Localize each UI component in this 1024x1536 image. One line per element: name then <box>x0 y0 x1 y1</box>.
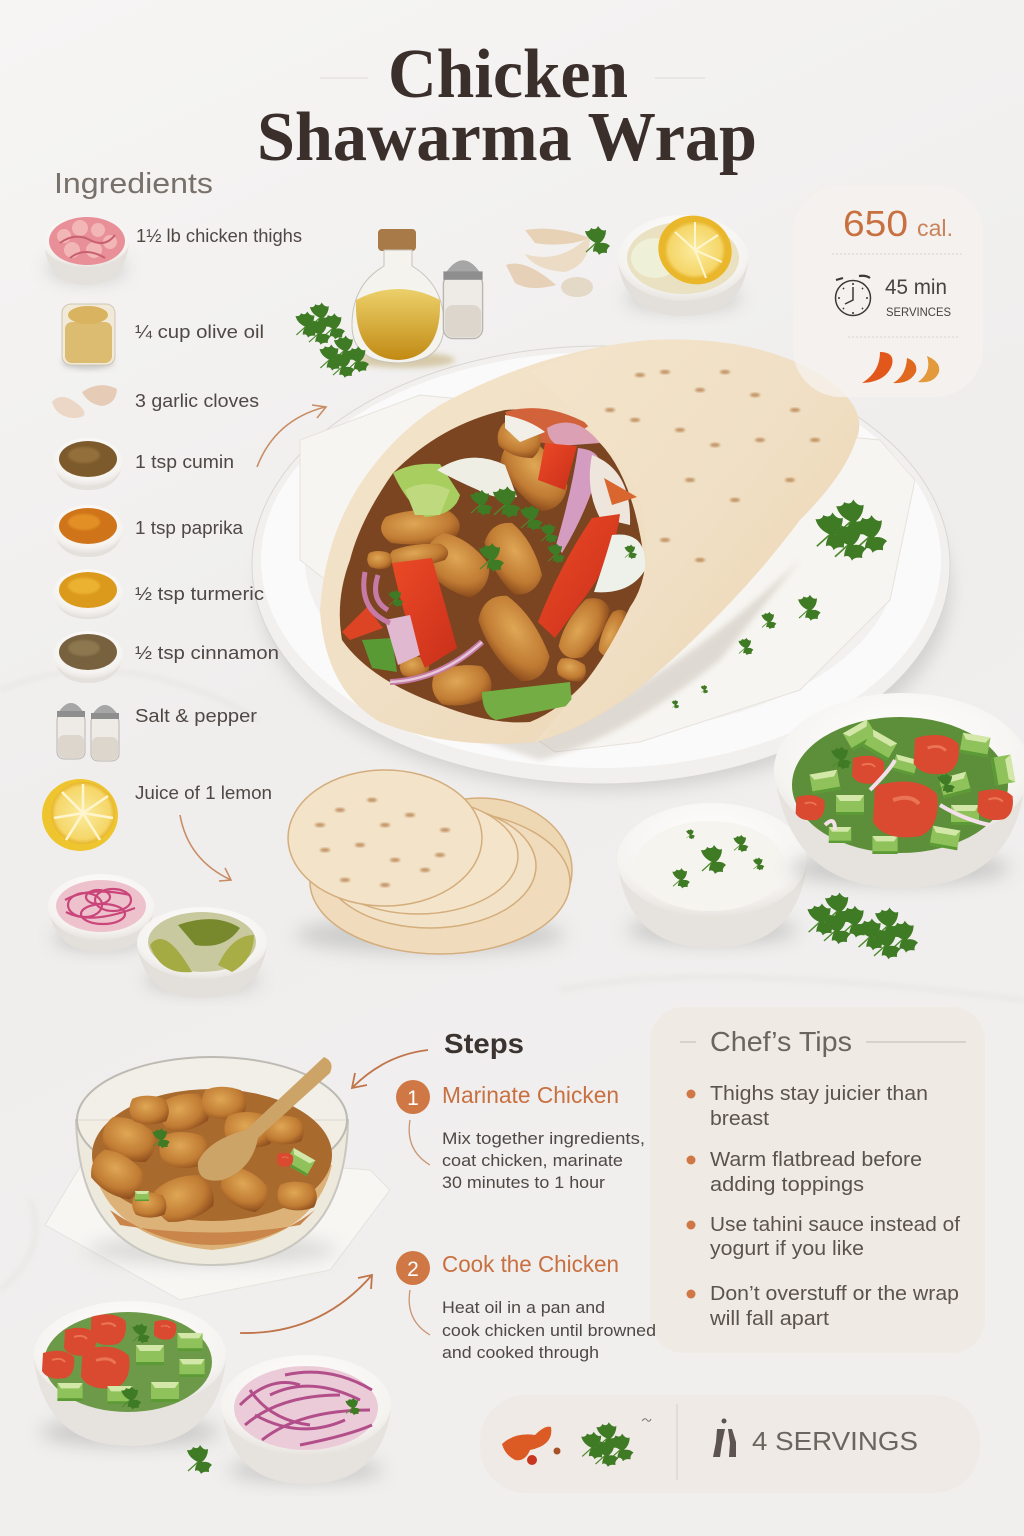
title: Shawarma Wrap <box>257 99 757 176</box>
parsley sprig near bottle <box>296 302 369 378</box>
tip 4: will fall apart <box>709 1308 829 1330</box>
ingredient: cumin: 1 tsp cumin <box>135 452 234 472</box>
tip 3: Use tahini sauce instead of <box>710 1214 960 1236</box>
tip 2 <box>686 1149 922 1196</box>
bowl: red onions <box>221 1355 391 1484</box>
tip 4: Don’t overstuff or the wrap <box>710 1283 959 1305</box>
panel: servings pill <box>480 1395 980 1493</box>
oil bottle <box>352 229 455 368</box>
garlic group <box>506 226 610 297</box>
tip 4 <box>686 1283 959 1330</box>
calories: cal. <box>917 215 953 241</box>
ingredient: salt and pepper: Salt & pepper <box>135 706 257 726</box>
ingredient: salt and pepper <box>57 703 257 761</box>
ingredient: cumin <box>53 438 234 490</box>
tip 1 <box>686 1083 928 1130</box>
step 1 <box>396 1080 645 1192</box>
glass bowl: marinating chicken <box>45 1057 390 1300</box>
panel: ingredients list <box>42 217 302 851</box>
ingredient: chicken thighs <box>43 217 302 285</box>
tip 2: Warm flatbread before <box>710 1149 922 1171</box>
arrow: steps to bowl <box>352 1050 428 1088</box>
tip 1: Thighs stay juicier than <box>710 1083 928 1105</box>
wooden spoon <box>198 1057 332 1181</box>
bowl: lemon <box>618 205 748 316</box>
bowl: pickled onion <box>48 874 154 952</box>
heading: ingredients: Ingredients <box>54 168 213 200</box>
step 2 <box>396 1251 656 1362</box>
flatbread outer fold <box>530 340 859 742</box>
salt shaker <box>443 260 483 339</box>
ingredient: paprika: 1 tsp paprika <box>135 518 244 538</box>
icon: stopwatch <box>836 276 870 316</box>
filling <box>340 409 645 722</box>
time <box>885 276 951 319</box>
wrap <box>320 340 887 760</box>
ingredient: paprika <box>53 505 244 557</box>
tip 1: breast <box>710 1108 769 1130</box>
step 1: 30 minutes to 1 hour <box>442 1173 605 1192</box>
parsley: beside bowls <box>808 892 918 959</box>
servings text: 4 SERVINGS <box>752 1426 918 1456</box>
time: 45 min <box>885 276 947 299</box>
ingredient: cinnamon: ½ tsp cinnamon <box>135 643 279 663</box>
parsley: bottom <box>187 1445 212 1474</box>
ingredient: cinnamon <box>53 631 279 683</box>
step 1: coat chicken, marinate <box>442 1151 623 1170</box>
bowl: yogurt <box>617 803 807 948</box>
ingredient: garlic cloves <box>52 385 259 418</box>
badge 1 <box>396 1080 430 1114</box>
tip 3: yogurt if you like <box>710 1238 864 1260</box>
bowl: salad small <box>34 1301 226 1446</box>
icon: chili and parsley <box>502 1419 651 1467</box>
badge 2 <box>396 1251 430 1285</box>
step 2: Cook the Chicken <box>442 1251 619 1277</box>
flatbread stack <box>288 770 572 954</box>
time: SERVINCES <box>886 305 951 319</box>
badge 2: 2 <box>407 1258 419 1281</box>
icon: chili peppers <box>862 352 939 383</box>
step 1: Mix together ingredients, <box>442 1129 645 1148</box>
ingredient: garlic cloves: 3 garlic cloves <box>135 391 259 411</box>
tip 2: adding toppings <box>710 1174 864 1196</box>
ingredient: turmeric: ½ tsp turmeric <box>135 584 264 604</box>
garnish parsley on plate <box>672 500 887 709</box>
step 2: Heat oil in a pan and <box>442 1298 605 1317</box>
title: Chicken <box>388 36 628 113</box>
ingredient: turmeric <box>53 569 264 619</box>
card: nutrition <box>793 185 983 397</box>
arrow: salad to step 2 <box>240 1275 372 1333</box>
heading: steps: Steps <box>444 1028 524 1059</box>
ingredient: olive oil: ¼ cup olive oil <box>135 322 264 342</box>
step 2: and cooked through <box>442 1343 599 1362</box>
step 2: cook chicken until browned <box>442 1321 656 1340</box>
step 1: Marinate Chicken <box>442 1082 619 1108</box>
icon: people <box>713 1418 736 1457</box>
panel: chef's tips <box>650 1007 985 1353</box>
arrow: ingredients to wrap <box>257 405 326 467</box>
ingredient: lemon: Juice of 1 lemon <box>135 783 272 803</box>
tip 3 <box>686 1214 960 1260</box>
ingredient: olive oil <box>62 304 264 369</box>
plate <box>252 346 950 790</box>
bowl: pickles <box>137 907 267 998</box>
bowl: salad <box>774 693 1024 888</box>
ingredient: chicken thighs: 1½ lb chicken thighs <box>136 226 302 246</box>
heading: chef's tips: Chef’s Tips <box>710 1026 852 1057</box>
calories <box>843 203 953 244</box>
flatbread <box>320 340 859 744</box>
title <box>257 36 757 176</box>
calories: 650 <box>843 203 908 244</box>
ingredient: lemon <box>42 779 272 851</box>
arrow: lemon to sides <box>180 815 231 881</box>
badge 1: 1 <box>407 1087 419 1110</box>
